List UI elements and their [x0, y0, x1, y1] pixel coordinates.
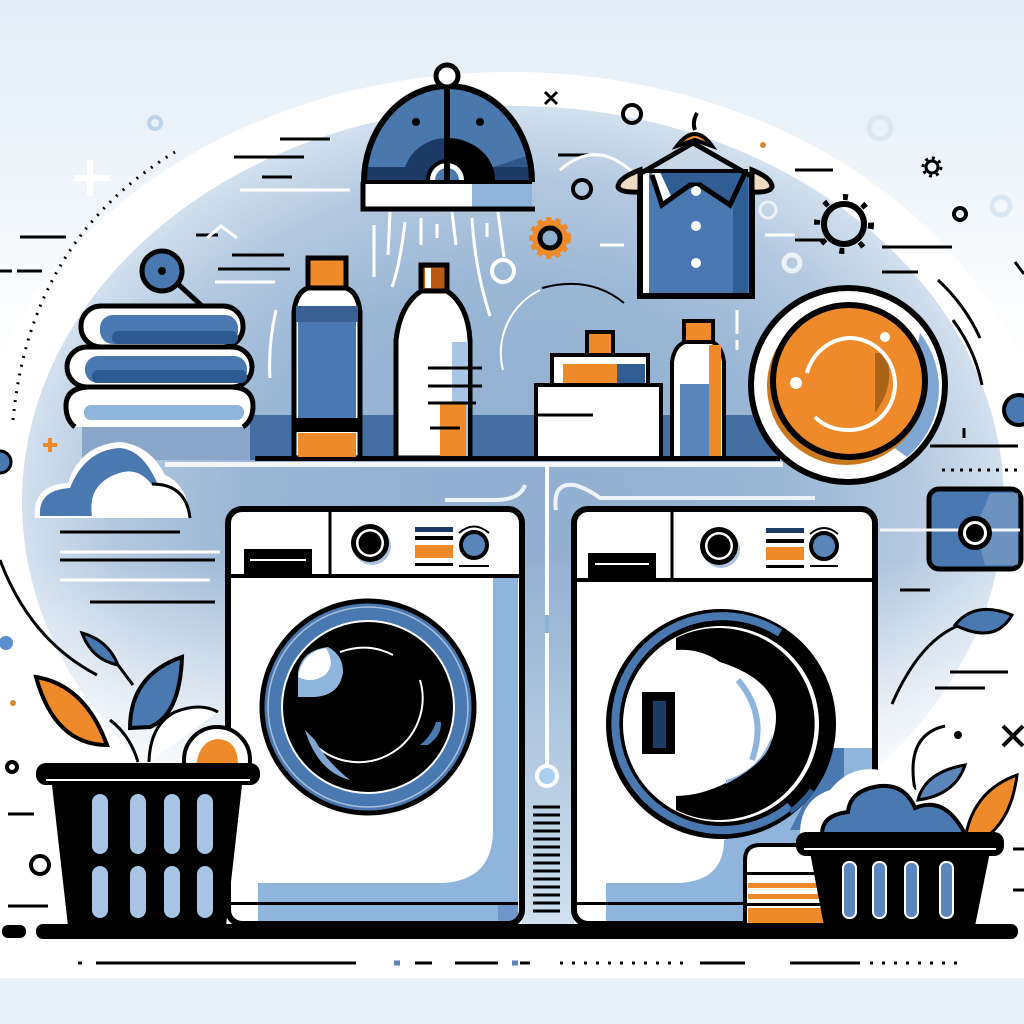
- detergent box: [536, 332, 661, 458]
- floor line: [2, 924, 1018, 939]
- washing machine left: [228, 509, 522, 924]
- right basket with laundry: [796, 726, 1017, 926]
- cloud: [35, 442, 190, 518]
- edge dots: [0, 395, 1024, 675]
- folded cloth stack: [745, 845, 825, 925]
- bottom dashes: [78, 962, 860, 964]
- white dash lines: [60, 130, 1020, 580]
- right door: [606, 609, 836, 839]
- shower head: [363, 65, 535, 316]
- bottle tall blue: [294, 258, 360, 458]
- background disc: [0, 106, 1024, 900]
- right leaf sprig: [892, 609, 1012, 704]
- small rings decoration: [7, 105, 1010, 874]
- shelf line: [165, 456, 783, 467]
- small bottle: [672, 321, 724, 458]
- orange round plate: [751, 288, 945, 482]
- right control knob: [880, 489, 1021, 569]
- bottom blue marks: [394, 960, 518, 966]
- orange gear: [532, 220, 568, 256]
- shirt on hanger: [617, 113, 772, 296]
- bottom dots: [560, 962, 960, 964]
- center gap and vent: [522, 465, 574, 925]
- gear right: [817, 158, 941, 251]
- left basket with plants: [36, 633, 260, 926]
- decorative dash lines: [0, 92, 1024, 906]
- stacked towels: [66, 251, 253, 427]
- bottle white: [396, 265, 482, 458]
- connector lines: [445, 485, 815, 510]
- left door: [262, 601, 474, 813]
- thin arc behind box: [501, 284, 624, 370]
- washing machine right: [574, 509, 875, 924]
- shelf band: [82, 415, 780, 460]
